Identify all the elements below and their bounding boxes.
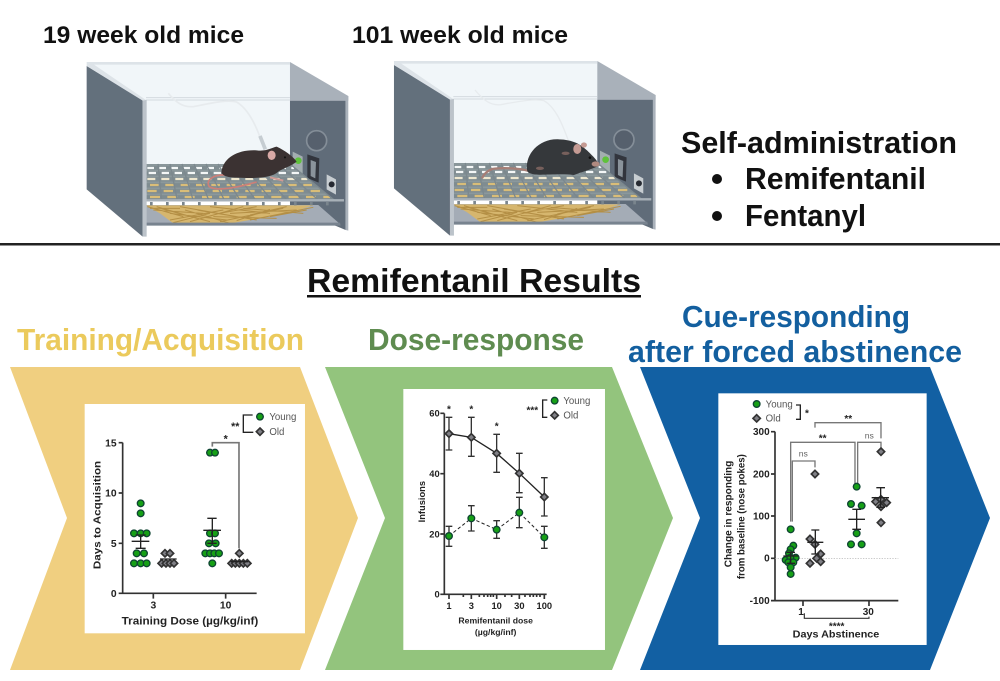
chart card: cue responding: -100	[750, 596, 770, 607]
heading: 101 week old mice: 101 week old mice	[352, 22, 568, 49]
chart card: cue responding: **	[819, 433, 827, 444]
chart card: dose-response infusions	[403, 389, 605, 650]
chart card: cue responding: ****	[829, 621, 845, 632]
chart card: dose-response infusions: *	[447, 404, 451, 415]
chart card: cue responding: 100	[753, 511, 770, 522]
chart card: dose-response infusions: Remifentanil dose	[458, 616, 533, 626]
chart card: days to acquisition: 15	[105, 438, 117, 449]
text block: self-administration list	[681, 125, 957, 233]
chart card: dose-response infusions: 1	[446, 601, 452, 611]
chart card: days to acquisition: 10	[105, 489, 117, 500]
chart card: days to acquisition: Old	[269, 427, 284, 438]
heading: Cue-responding after forced abstinence: after forced abstinence	[628, 334, 962, 369]
chart card: cue responding: *	[805, 409, 809, 420]
chart card: dose-response infusions: Young	[563, 396, 590, 407]
panel arrow: training	[10, 367, 358, 670]
chart card: dose-response infusions: Old	[563, 411, 578, 422]
chart card: cue responding: 200	[753, 469, 770, 480]
chart card: days to acquisition: 3	[150, 600, 156, 611]
heading: Cue-responding after forced abstinence	[628, 299, 962, 369]
text block: self-administration list: Self-administration	[681, 125, 957, 160]
heading: 19 week old mice: 19 week old mice	[43, 22, 244, 49]
text block: self-administration list: Fentanyl	[745, 198, 866, 233]
chart card: cue responding: Days Abstinence	[793, 629, 880, 640]
chart card: dose-response infusions: 10	[491, 601, 502, 611]
chart card: dose-response infusions: 20	[429, 529, 440, 539]
chart card: days to acquisition: Young	[269, 412, 296, 423]
chart card: dose-response infusions: Infusions	[417, 481, 427, 522]
chart card: days to acquisition: Training Dose (µg/kg/inf)	[122, 615, 259, 627]
chart card: dose-response infusions: 60	[429, 409, 440, 419]
chart card: dose-response infusions: *	[469, 404, 473, 415]
chart card: dose-response infusions: 40	[429, 469, 440, 479]
chart card: cue responding: Old	[766, 414, 781, 425]
heading: Cue-responding after forced abstinence: Cue-responding	[682, 299, 910, 334]
text block: self-administration list: Remifentanil	[745, 161, 926, 196]
chart card: cue responding: ns	[799, 449, 809, 459]
chart card: cue responding: ns	[865, 430, 875, 440]
chart card: dose-response infusions: 100	[537, 601, 552, 611]
illustration: young mouse in chamber	[87, 62, 348, 237]
chart card: days to acquisition: 0	[111, 589, 117, 600]
chart card: cue responding: from baseline (nose pokes)	[736, 454, 747, 579]
chart card: days to acquisition: 5	[111, 539, 117, 550]
chart card: dose-response infusions: *	[495, 422, 499, 433]
chart card: cue responding: 1	[798, 607, 804, 618]
chart card: days to acquisition: 10	[220, 600, 232, 611]
chart card: days to acquisition: *	[224, 434, 229, 446]
title: Remifentanil Results: Remifentanil Results	[307, 262, 641, 299]
panel arrow: cue-responding	[640, 367, 990, 670]
chart card: cue responding: Young	[766, 399, 793, 410]
chart card: cue responding: 0	[764, 554, 770, 565]
heading: Dose-response: Dose-response	[368, 322, 584, 357]
chart card: days to acquisition: Days to Acquisition	[93, 461, 104, 569]
panel arrow: dose-response	[325, 367, 673, 670]
chart card: dose-response infusions: 0	[434, 590, 440, 600]
chart card: cue responding	[718, 393, 927, 645]
chart card: days to acquisition	[85, 404, 305, 633]
chart card: dose-response infusions: 3	[469, 601, 474, 611]
chart card: cue responding: 300	[753, 427, 770, 438]
chart card: dose-response infusions: 30	[514, 601, 525, 611]
chart card: days to acquisition: **	[231, 421, 240, 433]
chart card: dose-response infusions: (µg/kg/inf)	[475, 627, 517, 637]
heading: Training/Acquisition: Training/Acquisition	[17, 322, 304, 357]
chart card: dose-response infusions: ***	[526, 405, 538, 416]
chart card: cue responding: Change in responding	[724, 461, 735, 567]
chart card: cue responding: 30	[863, 607, 874, 618]
chart card: cue responding: **	[844, 414, 852, 425]
illustration: old mouse in chamber	[394, 61, 656, 236]
